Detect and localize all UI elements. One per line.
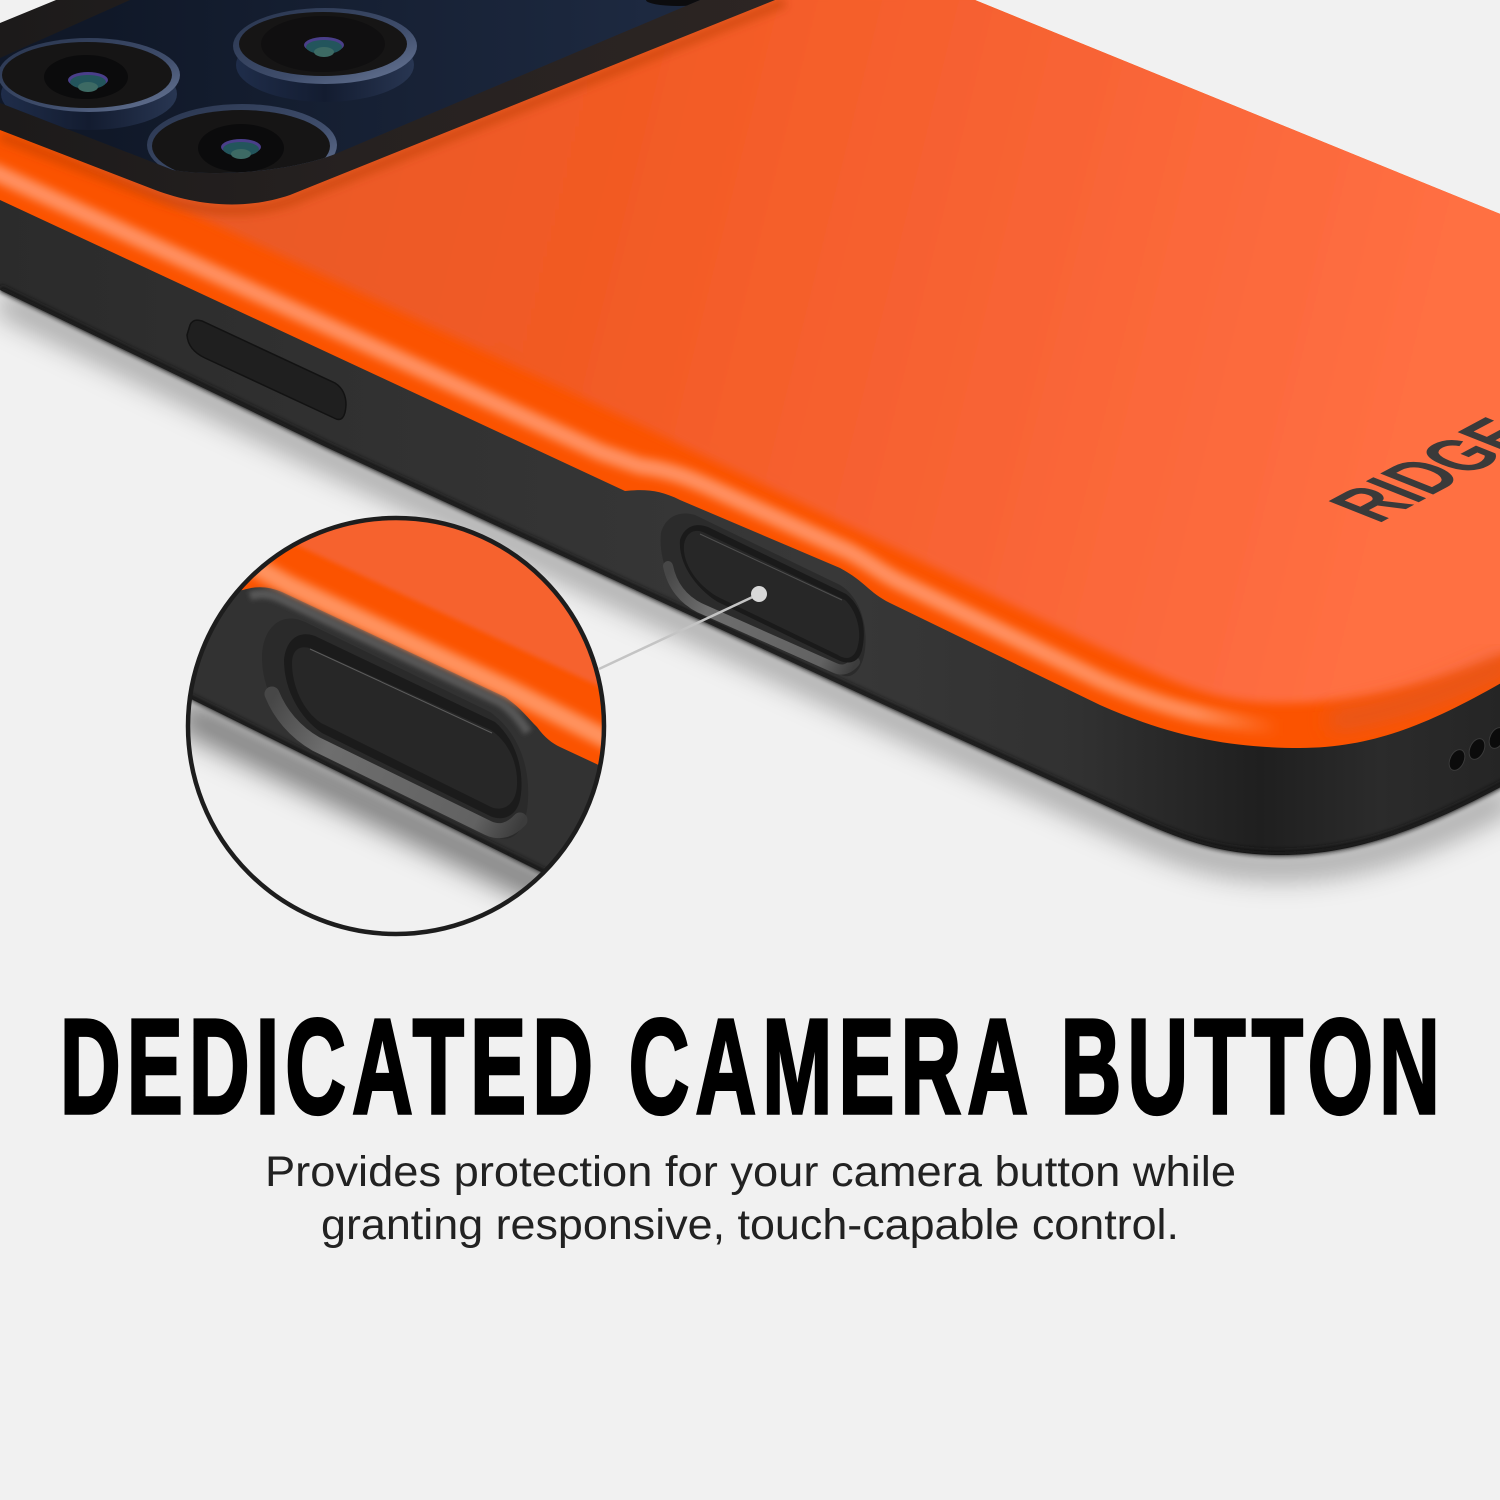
- description line 2: granting responsive, touch-capable control.: [321, 1201, 1179, 1249]
- description text: [265, 1148, 1236, 1249]
- magnified button pad: [292, 647, 517, 809]
- glossy edge highlight: [0, 170, 1280, 728]
- corner shade on orange edge: [1330, 662, 1500, 722]
- magnified drop shadow: [190, 700, 541, 906]
- magnifier ring: [188, 518, 604, 934]
- camera button pad: [684, 531, 859, 658]
- lens: lower: [147, 104, 337, 174]
- shadow below camera frame: [0, 2, 785, 210]
- matte orange surface: [0, 0, 1500, 703]
- magnified gray edge sheen: [250, 594, 528, 732]
- lens: right: [233, 8, 417, 102]
- magnified side wall: [192, 587, 598, 872]
- magnified button recess: [262, 618, 528, 839]
- camera plate with lenses: [0, 0, 700, 174]
- magnified highlight: [240, 558, 620, 746]
- background corner: [0, 0, 56, 23]
- description line 1: Provides protection for your camera button while: [265, 1148, 1236, 1196]
- phone case illustration: [0, 0, 1500, 866]
- speaker holes: [1446, 725, 1500, 773]
- magnifier callout: [186, 516, 606, 936]
- magnified orange edge: [241, 544, 602, 765]
- flash cutout: [646, 0, 700, 6]
- magnified surface: [296, 520, 598, 688]
- volume button: [187, 320, 346, 419]
- pointer line to magnifier: [599, 586, 767, 669]
- drop shadow under phone: [0, 300, 1500, 866]
- orange back panel: [0, 0, 1500, 760]
- camera button recess: [661, 514, 866, 676]
- case side wall: [0, 120, 1500, 855]
- lens: left: [0, 38, 180, 130]
- side wall lower edge shade: [0, 288, 1500, 853]
- camera plateau frame: [0, 0, 785, 204]
